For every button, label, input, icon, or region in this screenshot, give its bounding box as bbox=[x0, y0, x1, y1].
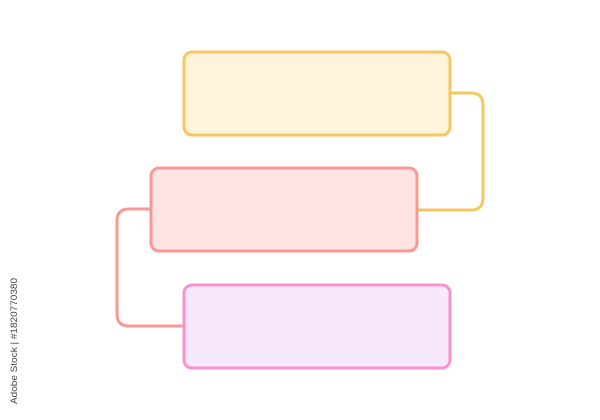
panel: box 3 bbox=[184, 285, 450, 368]
panel: box 1 bbox=[184, 52, 450, 135]
panel: box 2 bbox=[151, 168, 417, 251]
text: stock id: Adobe Stock | #1820770380 bbox=[9, 278, 20, 404]
arrow: salmon connector bbox=[117, 209, 183, 326]
arrow: yellow connector bbox=[417, 93, 483, 210]
